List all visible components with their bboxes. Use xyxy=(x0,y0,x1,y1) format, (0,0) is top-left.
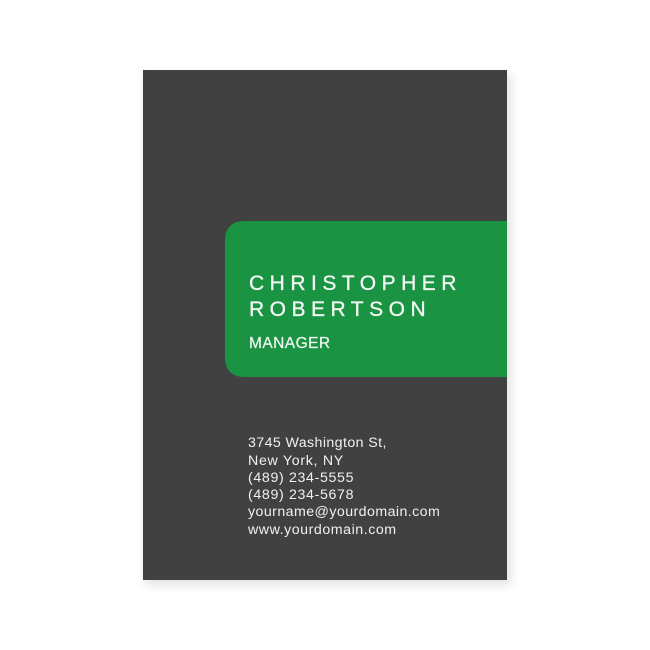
panel: dark grey card xyxy=(143,70,507,580)
text block: contact details xyxy=(247,435,440,538)
text block: contact details: New York, NY xyxy=(248,453,344,469)
card shadow xyxy=(145,74,511,585)
text block: contact details: (489) 234-5678 xyxy=(248,487,354,503)
text block: contact details: yourname@yourdomain.com xyxy=(248,504,440,520)
text: job title: MANAGER xyxy=(249,335,331,352)
heading: name xyxy=(249,272,462,321)
panel: green name band xyxy=(225,221,507,377)
text block: contact details: (489) 234-5555 xyxy=(248,470,354,486)
text block: contact details: www.yourdomain.com xyxy=(247,522,397,538)
text block: contact details: 3745 Washington St, xyxy=(248,435,387,451)
heading: name: CHRISTOPHER xyxy=(249,272,462,295)
heading: name: ROBERTSON xyxy=(249,298,431,321)
